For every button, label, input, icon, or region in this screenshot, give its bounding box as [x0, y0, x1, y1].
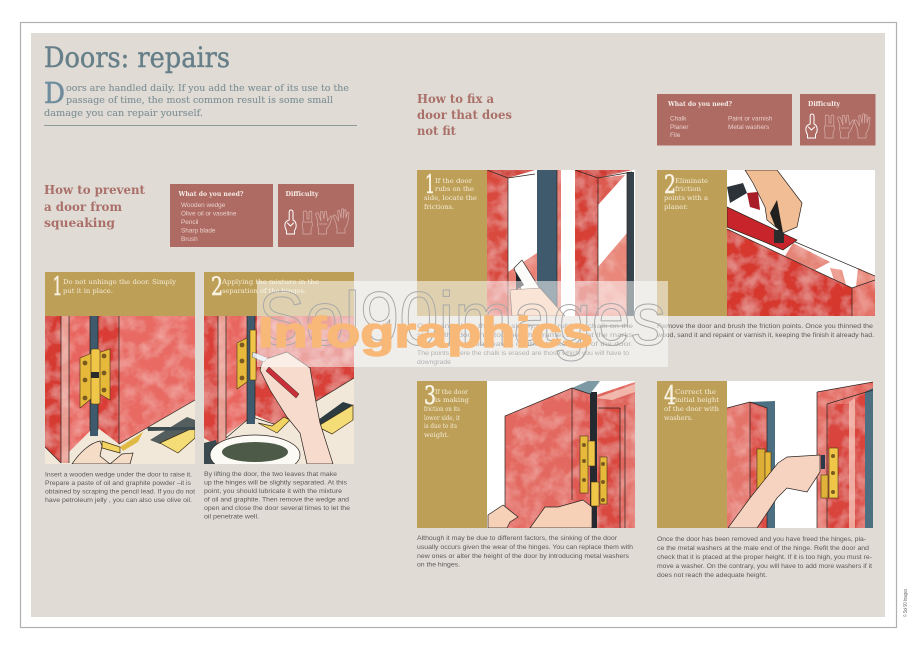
- illustration: sunken door hinges: [487, 380, 635, 528]
- hinge right: [829, 448, 838, 498]
- wedge and blade: [150, 417, 195, 444]
- step 1 caption: [45, 472, 195, 504]
- step 3 caption: on the hinges.: [417, 562, 460, 568]
- hinge left: [757, 449, 765, 489]
- heading: how to fix a door that does not fit: door that does: [417, 107, 512, 122]
- step 2 caption: of oil and graphite. Then remove the wedge and: [204, 496, 349, 504]
- step 2 caption: point, you should lubricate it with the mixture: [204, 488, 342, 495]
- step 4 header: [657, 381, 727, 528]
- heading: how to fix a door that does not fit: How to fix a: [417, 91, 494, 106]
- title: Doors: repairs: [44, 41, 230, 74]
- step 1 caption: Prepare a paste of oil and graphite powder –it is: [45, 480, 192, 487]
- panel: what do you need (squeaking): Pencil: [181, 219, 198, 226]
- panel: what do you need (fit): [657, 94, 792, 146]
- panel: what do you need (fit): Paint or varnish: [728, 116, 773, 122]
- step 3 header: lower side, it: [424, 414, 460, 422]
- step 3 caption: new ones or alter the height of the door by introducing metal washers: [417, 553, 630, 560]
- panel: what do you need (fit): Metal washers: [728, 124, 769, 131]
- step 2 caption: oil penetrate well.: [204, 514, 259, 520]
- step 1 header: 1: [425, 170, 435, 199]
- copyright note: © Sol 90 Images: [902, 589, 909, 617]
- step: fit 4: [657, 381, 873, 579]
- panel: what do you need (squeaking): Olive oil or vaseline: [181, 210, 237, 218]
- panel: difficulty (fit): [800, 94, 876, 146]
- intro paragraph: passage of time, the most common result is some small: [66, 95, 333, 106]
- step 1 header: side, locate the: [424, 194, 477, 202]
- icon: difficulty hands: [806, 114, 870, 138]
- illustration: planing door: [727, 170, 875, 316]
- step 4 caption: check that it is placed at the proper height. If it is too high, you must re-: [657, 554, 872, 561]
- step 1 header: [45, 272, 195, 316]
- step 3 header: is due to its: [424, 422, 457, 430]
- step 1 caption: have petroleum jelly , you can also use olive oil.: [45, 497, 192, 504]
- step 3 caption: usually occurs given the wear of the hinges. You can replace them with: [417, 544, 633, 551]
- step 4 caption: [657, 536, 872, 579]
- panel: what do you need (fit): What do you need?: [667, 101, 732, 108]
- illustration: chalk on door edge: [487, 170, 635, 316]
- hand: [72, 441, 133, 464]
- panel: what do you need (squeaking): Sharp blade: [181, 228, 216, 234]
- panel: what do you need (squeaking): What do you need?: [177, 191, 244, 198]
- step 1 caption: Open and close the door slowly, after rubbing chalk on the: [417, 323, 633, 330]
- step 4 caption: ce the metal washers at the male end of the hinge. Refit the door and: [657, 545, 869, 552]
- step 4 caption: does not reach the adequate height.: [657, 572, 767, 579]
- heading: how to fix a door that does not fit: not fit: [417, 123, 456, 138]
- step 4 header: 4: [664, 381, 676, 410]
- step 1 header: put it in place.: [63, 287, 113, 295]
- intro paragraph: oors are handled daily. If you add the wear of its use to the: [66, 83, 349, 94]
- drop cap: D: [44, 76, 65, 110]
- panel: difficulty (fit): Difficulty: [808, 101, 841, 108]
- step 2 caption: By lifting the door, the two leaves that make: [204, 471, 337, 478]
- panel: what do you need (squeaking): Brush: [181, 236, 198, 243]
- step 1 caption: Insert a wooden wedge under the door to raise it.: [45, 472, 192, 478]
- heading: how to prevent a door from squeaking: a door from: [44, 199, 122, 214]
- step 2 header: Applying the mixture in the: [221, 278, 319, 286]
- step 2 caption: up the hinges will be slightly separated. At this: [204, 480, 348, 486]
- step 1 header: [417, 170, 487, 316]
- panel: what do you need (fit): File: [670, 132, 681, 139]
- step 2 header: [204, 272, 354, 316]
- plate of paste: [204, 440, 217, 464]
- step 1 caption: [417, 323, 634, 366]
- step 2 header: [657, 170, 727, 316]
- watermark: Sol90images: [258, 277, 666, 362]
- step 3 header: is making: [435, 396, 470, 404]
- step 3 caption: Although it may be due to different factors, the sinking of the door: [417, 535, 618, 542]
- intro paragraph: damage you can repair yourself.: [44, 108, 203, 119]
- step 2 caption: [204, 471, 350, 520]
- step: squeak 2: [204, 272, 354, 520]
- step 1 caption: that the movement leaves on the chalked side of the door.: [417, 341, 633, 348]
- panel: difficulty (squeaking): [278, 184, 354, 247]
- step: fit 1: [417, 170, 635, 366]
- step 4 header: washers.: [664, 414, 693, 422]
- illustration: adding washers: [727, 381, 873, 528]
- chalk and hand: [514, 260, 540, 289]
- panel: what do you need (fit): Planer: [670, 124, 689, 131]
- step 1 header: If the door: [435, 177, 473, 185]
- step 2 header: 2: [211, 272, 223, 301]
- step 1 header: rubs on the: [435, 185, 474, 193]
- step 3 header: 3: [424, 381, 436, 410]
- step 1 caption: side of the door that touches the frame. Look at the marks: [417, 332, 634, 339]
- wedges: [258, 417, 290, 433]
- intro paragraph: [44, 76, 349, 119]
- step 2 caption: Remove the door and brush the friction points. Once you thinned the: [657, 323, 873, 330]
- step 1 caption: downgrade: [417, 359, 451, 366]
- watermark: Infographics: [258, 309, 593, 357]
- step 4 header: initial height: [675, 396, 719, 404]
- step 3 header: If the door: [435, 388, 469, 396]
- hinge: [80, 353, 92, 408]
- hands: [488, 505, 518, 528]
- step 2 header: friction: [675, 185, 702, 193]
- panel: what do you need (fit): Chalk: [670, 116, 687, 122]
- panel: difficulty (squeaking): Difficulty: [286, 191, 319, 198]
- step: fit 3: [417, 380, 635, 568]
- step 2 header: separation of the hinges.: [222, 287, 306, 295]
- step 4 header: of the door with: [664, 405, 720, 413]
- hand: [745, 170, 802, 233]
- step 1 caption: The points where the chalk is erased are those which you will have to: [417, 350, 629, 357]
- step: fit 2: [656, 170, 875, 339]
- step 2 header: planer.: [664, 203, 688, 211]
- step 2 header: points with a: [664, 194, 708, 202]
- step 1 header: 1: [52, 272, 62, 301]
- hand: [728, 455, 820, 528]
- illustration: applying lubricant: [204, 316, 354, 475]
- heading: how to prevent a door from squeaking: squeaking: [44, 215, 115, 230]
- step 1 caption: obtained by scraping the pencil lead. If you do not: [45, 488, 195, 496]
- step 1 header: frictions.: [424, 203, 454, 211]
- illustration: wedge under door: [45, 316, 195, 464]
- step 3 header: weight.: [424, 431, 449, 439]
- step 4 caption: Once the door has been removed and you have freed the hinges, pla-: [657, 536, 866, 543]
- step 4 caption: move a washer. On the contrary, you will have to add more washers if it: [657, 563, 872, 570]
- step 2 header: 2: [664, 170, 676, 199]
- step 3 caption: [417, 535, 633, 568]
- step: squeak 1: [45, 272, 195, 504]
- step 1 header: Do not unhinge the door. Simply: [63, 278, 176, 286]
- step 2 header: Eliminate: [675, 177, 708, 185]
- panel: what do you need (squeaking): [170, 184, 273, 247]
- step 2 caption: [656, 323, 874, 339]
- heading: how to fix a door that does not fit: [417, 91, 512, 138]
- step 4 header: Correct the: [675, 388, 716, 396]
- hand with brush: [260, 352, 333, 464]
- step 3 header: friction on its: [424, 405, 460, 413]
- icon: difficulty hands: [285, 209, 349, 234]
- panel: what do you need (squeaking): Wooden wedge: [181, 202, 226, 209]
- hinge: [580, 436, 588, 493]
- step 2 caption: open and close the door several times to let the: [204, 505, 350, 512]
- hinge: [237, 338, 247, 389]
- heading: how to prevent a door from squeaking: How to prevent: [44, 182, 145, 197]
- step 3 header: [417, 381, 487, 528]
- heading: how to prevent a door from squeaking: [44, 182, 145, 230]
- step 2 caption: wood, sand it and repaint or varnish it, keeping the finish it already had.: [656, 332, 874, 339]
- planer: [727, 207, 797, 250]
